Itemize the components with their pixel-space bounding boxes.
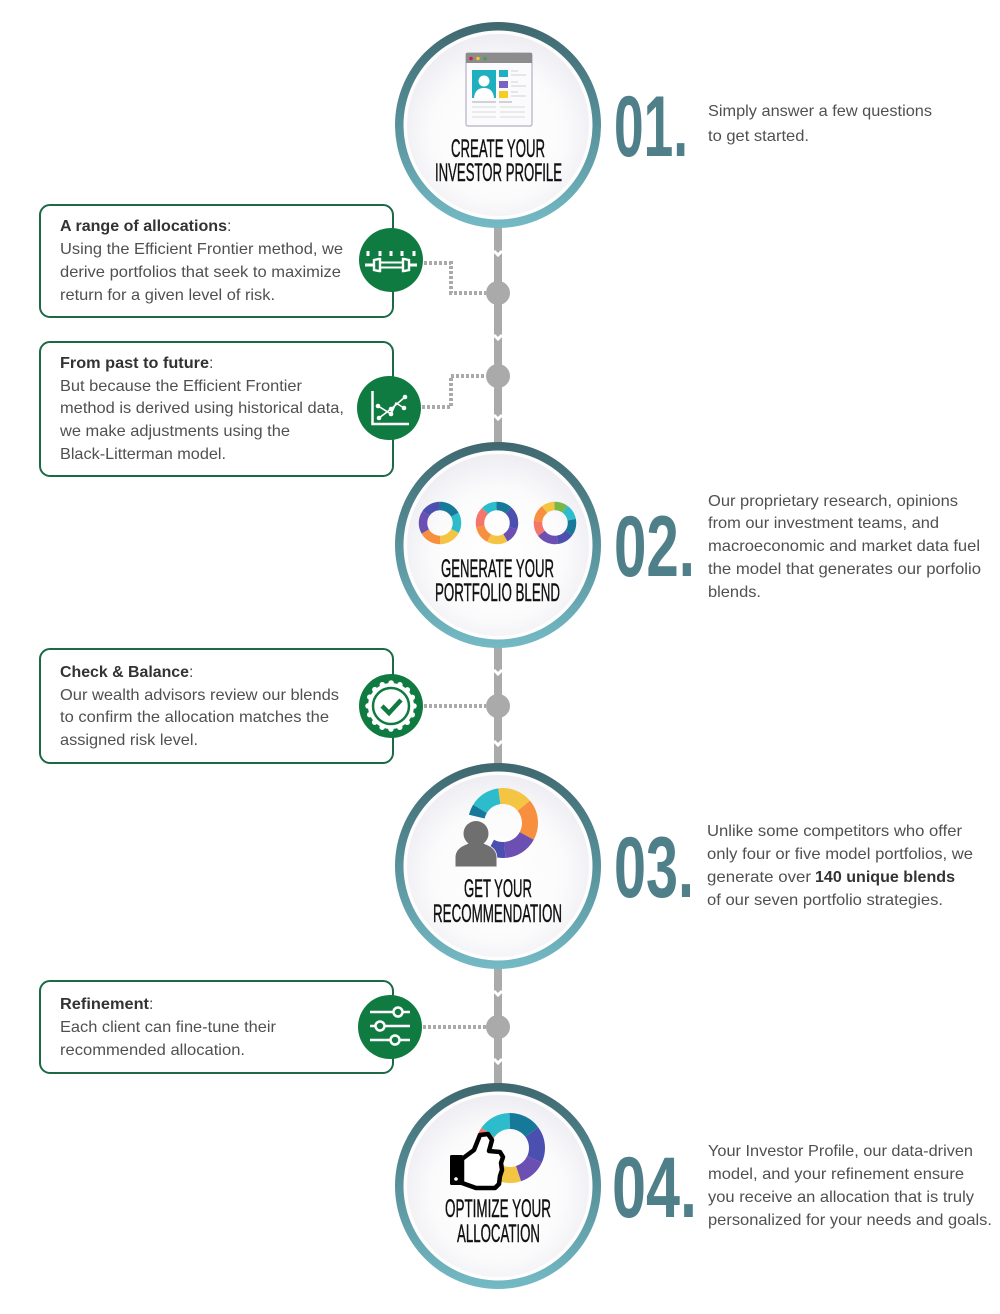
heading: optimize your allocation [445,1195,551,1248]
panel: a range of allocations [40,205,393,317]
step 1 circle [395,22,601,228]
icon: donut one [423,506,457,540]
step 3 description: of our seven portfolio strategies. [707,892,943,909]
heading: optimize your allocation: OPTIMIZE YOUR [445,1195,551,1223]
panel: check and balance [40,649,393,763]
heading: generate your portfolio blend [435,555,560,607]
panel text: assigned risk level. [60,732,198,749]
step 3 description: generate over [707,869,812,886]
number 01: 01. [614,79,688,175]
panel text: But because the Efficient Frontier [60,378,303,395]
heading: create your investor profile: INVESTOR PROFILE [435,159,562,187]
icon: donut three [538,506,572,540]
step 4 circle [395,1083,601,1289]
panel text: Each client can fine-tune their [60,1019,277,1036]
heading: create your investor profile: CREATE YOUR [451,135,545,163]
panel text: recommended allocation. [60,1042,245,1059]
icon: line chart [357,376,421,440]
icon: efficient frontier barbell [359,228,423,292]
step 1 description [708,103,932,145]
icon: allocation donut [483,1121,537,1175]
step 2 description: from our investment teams, and [708,515,939,532]
step 4 description: Your Investor Profile, our data-driven [708,1143,973,1160]
panel heading: Check & Balance [60,664,189,681]
panel text: Our wealth advisors review our blends [60,687,339,704]
panel text: Black-Litterman model. [60,446,226,463]
step 2 description: blends. [708,584,761,601]
panel: from past to future [40,342,393,476]
icon: thumbs up [450,1134,503,1188]
dotted connector: allocations [424,263,486,293]
panel text: return for a given level of risk. [60,287,275,304]
step 3 description [707,823,973,909]
step 3 circle [395,763,601,969]
panel heading: Refinement [60,996,150,1013]
heading: get your recommendation [433,875,562,928]
icon: donut two [480,506,514,540]
step 2 description [708,493,981,601]
panel text [60,1019,277,1059]
panel heading: : [149,996,153,1013]
panel text: derive portfolios that seek to maximize [60,264,341,281]
heading: optimize your allocation: ALLOCATION [457,1220,540,1248]
panel text: we make adjustments using the [59,423,290,440]
panel: refinement [40,981,393,1073]
panel heading: : [189,664,193,681]
icon: person [456,821,496,866]
step 4 description: model, and your refinement ensure [708,1166,964,1183]
step 2 description: Our proprietary research, opinions [708,493,958,510]
step 4 description: personalized for your needs and goals. [708,1212,992,1229]
number 02: 02. [614,499,695,595]
icon: profile window [466,53,532,126]
panel text [60,687,339,749]
panel heading: : [227,218,231,235]
panel heading: A range of allocations [60,218,227,235]
step 1 description: to get started. [708,128,809,145]
step 2 description: macroeconomic and market data fuel [708,538,980,555]
step 2 description: the model that generates our porfolio [708,561,981,578]
panel text [59,378,344,463]
dotted connector: check and balance [424,704,486,708]
step 4 description: you receive an allocation that is truly [708,1189,974,1206]
panel text [60,241,343,304]
timeline spine [486,226,510,1085]
icon: approval badge [359,674,423,738]
step 3 description: 140 unique blends [815,869,955,886]
step 3 description: only four or five model portfolios, we [707,846,973,863]
number 04: 04. [612,1140,697,1236]
heading: generate your portfolio blend: GENERATE YOUR [441,555,554,583]
panel text: method is derived using historical data, [60,400,344,417]
panel text: to confirm the allocation matches the [60,709,329,726]
icon: sliders [358,995,422,1059]
step 2 circle [395,442,601,648]
heading: create your investor profile [435,135,562,187]
step 4 description [708,1143,992,1229]
heading: get your recommendation: RECOMMENDATION [433,900,562,928]
heading: generate your portfolio blend: PORTFOLIO BLEND [435,579,560,607]
panel text: Using the Efficient Frontier method, we [60,241,343,258]
dotted connector: past to future [422,376,486,407]
step 1 description: Simply answer a few questions [708,103,932,120]
number 03: 03. [614,820,694,916]
panel heading: From past to future [60,355,209,372]
icon: recommendation donut [476,796,530,850]
step 3 description: Unlike some competitors who offer [707,823,963,840]
panel heading: : [209,355,213,372]
dotted connector: refinement [423,1025,486,1029]
heading: get your recommendation: GET YOUR [464,875,532,903]
